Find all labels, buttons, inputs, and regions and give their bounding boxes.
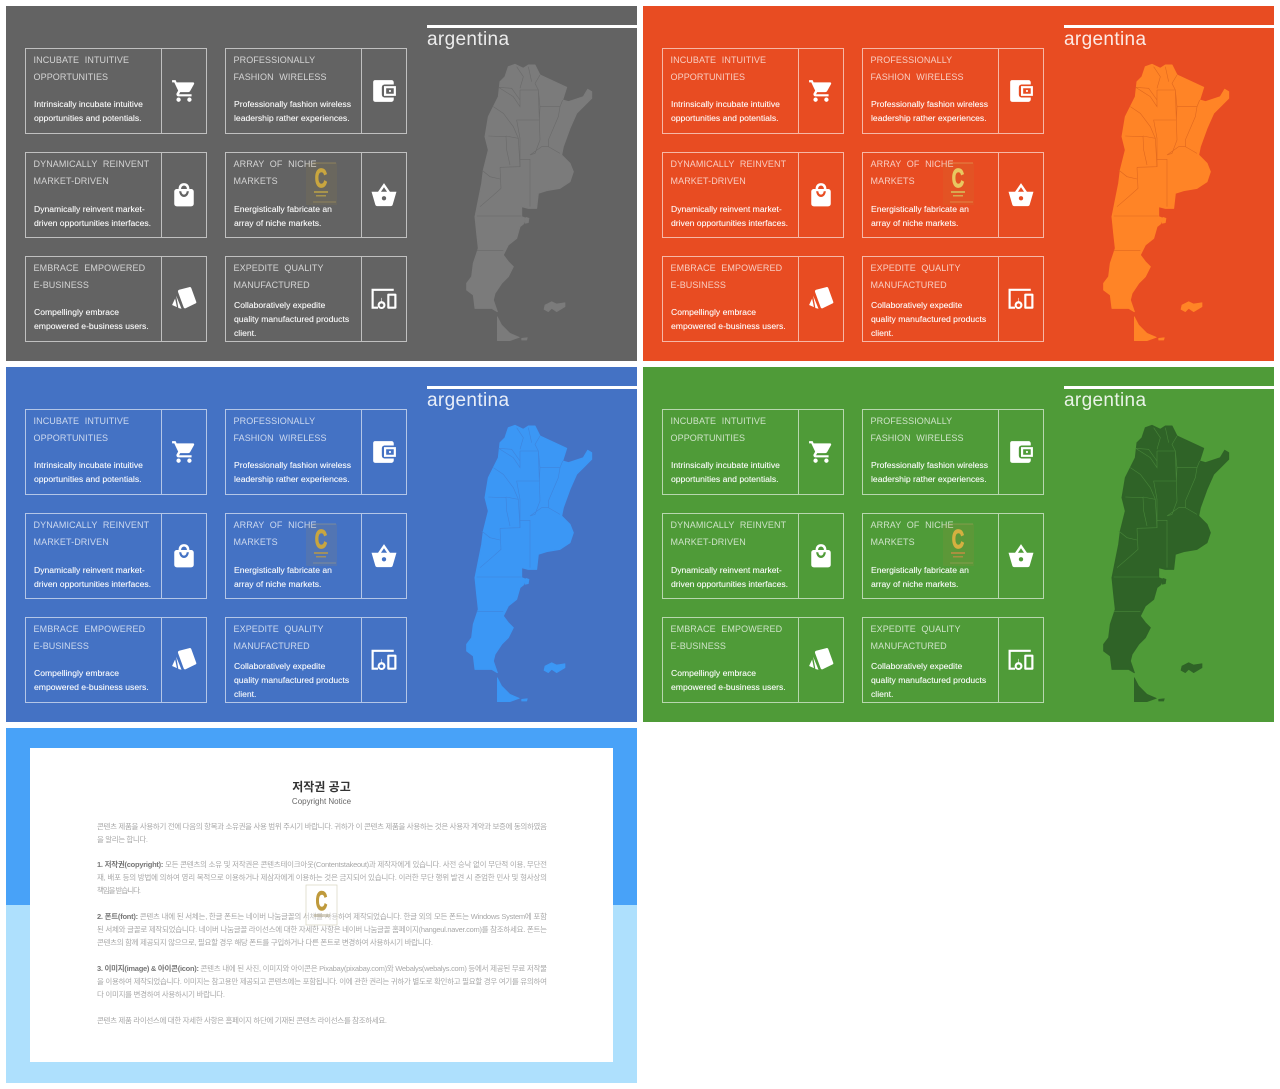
notice body: 3. 이미지(image) & 아이콘(icon): 콘텐츠 내에 된 사진, 이미지와 아이콘은 Pixabay(pixabay.com)와 Webalys(webalys.com) 등에서 제공된 무료 저작물 xyxy=(97,963,547,973)
card: professionally fashion: PROFESSIONALLY xyxy=(870,416,952,426)
watermark xyxy=(943,162,973,202)
panel: copyright notice xyxy=(6,728,637,1083)
watermark: C xyxy=(952,524,964,554)
card: professionally fashion: PROFESSIONALLY xyxy=(870,55,952,65)
card: professionally fashion xyxy=(225,409,407,495)
card: expedite quality xyxy=(862,617,1044,703)
card: incubate intuitive: OPPORTUNITIES xyxy=(34,433,108,443)
card: embrace empowered: EMBRACE EMPOWERED xyxy=(34,263,145,273)
card: incubate intuitive: Intrinsically incubate intuitive xyxy=(671,460,780,470)
watermark xyxy=(943,524,974,566)
card: professionally fashion: Professionally fashion wireless xyxy=(871,460,988,470)
card: dynamically reinvent: DYNAMICALLY REINVENT xyxy=(670,520,786,530)
notice body: 책임을 받습니다. xyxy=(97,885,141,895)
map: argentina xyxy=(1103,424,1230,702)
card: dynamically reinvent: DYNAMICALLY REINVENT xyxy=(670,159,786,169)
card: incubate intuitive: Intrinsically incubate intuitive xyxy=(671,99,780,109)
card: expedite quality: Collaboratively expedite xyxy=(234,300,325,310)
notice body: 콘텐츠 제품 라이선스에 대한 자세한 사항은 홈페이지 하단에 기재된 콘텐츠 라이선스를 참조하세요. xyxy=(97,1015,387,1025)
watermark: C xyxy=(315,163,327,193)
card: embrace empowered: EMBRACE EMPOWERED xyxy=(670,624,782,634)
card: array of niche: array of niche markets. xyxy=(234,218,321,228)
card: professionally fashion: leadership rather experiences. xyxy=(871,474,987,484)
card: incubate intuitive xyxy=(25,48,207,134)
card: dynamically reinvent: MARKET-DRIVEN xyxy=(670,176,746,186)
card: embrace empowered: empowered e-business users. xyxy=(34,321,149,331)
card: array of niche: ARRAY OF NICHE xyxy=(870,520,954,530)
card: expedite quality: MANUFACTURED xyxy=(234,280,310,290)
card: dynamically reinvent: MARKET-DRIVEN xyxy=(34,176,109,186)
watermark: C xyxy=(315,524,327,554)
card: array of niche: Energistically fabricate an xyxy=(871,565,969,575)
notice body xyxy=(97,821,547,1025)
card: expedite quality xyxy=(862,256,1044,342)
heading: argentina xyxy=(1064,29,1146,50)
card: dynamically reinvent: MARKET-DRIVEN xyxy=(34,537,109,547)
card: incubate intuitive xyxy=(662,409,844,495)
card: incubate intuitive: INCUBATE INTUITIVE xyxy=(34,416,129,426)
card: expedite quality: EXPEDITE QUALITY xyxy=(234,624,324,634)
card: expedite quality: Collaboratively expedite xyxy=(871,300,962,310)
card: incubate intuitive: INCUBATE INTUITIVE xyxy=(670,416,766,426)
card: dynamically reinvent xyxy=(662,152,844,238)
card: expedite quality: quality manufactured products xyxy=(234,675,349,685)
card: incubate intuitive: OPPORTUNITIES xyxy=(34,72,108,82)
watermark xyxy=(306,162,336,202)
card: array of niche xyxy=(225,513,407,599)
card: array of niche xyxy=(862,152,1044,238)
card: incubate intuitive: OPPORTUNITIES xyxy=(670,433,745,443)
card: dynamically reinvent xyxy=(662,513,844,599)
card: incubate intuitive: OPPORTUNITIES xyxy=(670,72,745,82)
card: embrace empowered: E-BUSINESS xyxy=(34,280,89,290)
card: embrace empowered xyxy=(25,617,207,703)
card: incubate intuitive xyxy=(662,48,844,134)
card: professionally fashion: Professionally fashion wireless xyxy=(234,460,351,470)
notice title: 저작권 공고 xyxy=(292,779,351,794)
map: argentina xyxy=(1103,64,1230,341)
card: professionally fashion: PROFESSIONALLY xyxy=(234,55,315,65)
card: expedite quality: quality manufactured products xyxy=(871,314,986,324)
map: argentina xyxy=(466,424,592,702)
card: expedite quality: Collaboratively expedite xyxy=(234,661,325,671)
card: array of niche: Energistically fabricate an xyxy=(871,204,969,214)
watermark: C xyxy=(952,163,964,193)
card: professionally fashion: leadership rather experiences. xyxy=(871,113,987,123)
card: array of niche: MARKETS xyxy=(870,537,915,547)
notice sheet xyxy=(30,748,613,1062)
card: expedite quality xyxy=(225,617,407,703)
card: embrace empowered: E-BUSINESS xyxy=(670,280,726,290)
notice body: 재, 배포 등의 방법에 의하여 영리 목적으로 이용하거나 제삼자에게 이용하는 것은 금지되어 있습니다. 이러한 무단 행위 발견 시 준엄한 민사 및 형사상의 xyxy=(97,872,547,882)
card: expedite quality: client. xyxy=(234,328,256,338)
card: expedite quality xyxy=(225,256,407,342)
card: incubate intuitive: opportunities and potentials. xyxy=(34,474,142,484)
card: embrace empowered xyxy=(662,617,844,703)
card: professionally fashion xyxy=(862,409,1044,495)
watermark: C xyxy=(316,886,327,916)
card: array of niche: Energistically fabricate an xyxy=(234,204,332,214)
card: professionally fashion: FASHION WIRELESS xyxy=(234,72,327,82)
card: dynamically reinvent: Dynamically reinvent market- xyxy=(34,204,145,214)
card: array of niche: array of niche markets. xyxy=(871,579,958,589)
map: argentina xyxy=(466,64,592,341)
notice body: 된 서체와 글꼴로 제작되었습니다. 네이버 나눔글꼴 라이선스에 대한 자세한 사항은 네이버 나눔글꼴 홈페이지(hangeul.naver.com)를 참조하세요. 폰트는 xyxy=(97,924,547,934)
card: dynamically reinvent: Dynamically reinvent market- xyxy=(671,204,782,214)
card: dynamically reinvent: driven opportunities interfaces. xyxy=(34,218,151,228)
card: embrace empowered: Compellingly embrace xyxy=(671,668,756,678)
card: dynamically reinvent xyxy=(25,513,207,599)
card: array of niche: MARKETS xyxy=(234,537,278,547)
card: professionally fashion: FASHION WIRELESS xyxy=(234,433,327,443)
card: array of niche: ARRAY OF NICHE xyxy=(234,159,317,169)
card: professionally fashion: FASHION WIRELESS xyxy=(870,433,964,443)
heading rule xyxy=(1064,25,1274,28)
card: array of niche: Energistically fabricate an xyxy=(234,565,332,575)
card: expedite quality: EXPEDITE QUALITY xyxy=(234,263,324,273)
card: expedite quality: client. xyxy=(871,689,893,699)
notice body: 을 이용하여 제작되었습니다. 이미지는 참고용만 제공되고 콘텐츠에는 포함됩니다. 이에 관한 권리는 귀하가 별도로 확인하고 필요할 경우 여기를 유의하여 xyxy=(97,976,547,986)
card: professionally fashion: PROFESSIONALLY xyxy=(234,416,315,426)
card: expedite quality: client. xyxy=(234,689,256,699)
notice body: 을 알리는 합니다. xyxy=(97,835,148,844)
card: embrace empowered xyxy=(25,256,207,342)
card: embrace empowered: empowered e-business users. xyxy=(671,321,786,331)
card: incubate intuitive: opportunities and potentials. xyxy=(34,113,142,123)
card: expedite quality: MANUFACTURED xyxy=(234,641,310,651)
card: array of niche xyxy=(862,513,1044,599)
card: array of niche: ARRAY OF NICHE xyxy=(870,159,954,169)
watermark xyxy=(306,524,337,566)
card: incubate intuitive xyxy=(25,409,207,495)
panel: gray argentina xyxy=(6,6,637,361)
card: dynamically reinvent: DYNAMICALLY REINVENT xyxy=(34,159,149,169)
card: professionally fashion: Professionally fashion wireless xyxy=(871,99,988,109)
card: incubate intuitive: INCUBATE INTUITIVE xyxy=(34,55,129,65)
card: embrace empowered: Compellingly embrace xyxy=(34,307,119,317)
card: incubate intuitive: Intrinsically incubate intuitive xyxy=(34,99,143,109)
card: embrace empowered xyxy=(662,256,844,342)
card: embrace empowered: Compellingly embrace xyxy=(671,307,756,317)
card: dynamically reinvent: Dynamically reinvent market- xyxy=(671,565,782,575)
notice body: 콘텐츠의 함께 제공되지 않으므로, 필요할 경우 해당 폰트를 구입하거나 다른 폰트로 변경하여 사용하시기 바랍니다. xyxy=(97,937,433,947)
card: dynamically reinvent: Dynamically reinvent market- xyxy=(34,565,145,575)
card: incubate intuitive: opportunities and potentials. xyxy=(671,113,778,123)
card: embrace empowered: EMBRACE EMPOWERED xyxy=(670,263,782,273)
card: array of niche xyxy=(225,152,407,238)
card: array of niche: MARKETS xyxy=(870,176,915,186)
card: array of niche: array of niche markets. xyxy=(234,579,321,589)
notice body: 다 이미지를 변경하여 사용하시기 바랍니다. xyxy=(97,989,225,999)
card: dynamically reinvent: driven opportunities interfaces. xyxy=(671,218,788,228)
card: expedite quality: EXPEDITE QUALITY xyxy=(870,263,961,273)
card: embrace empowered: E-BUSINESS xyxy=(34,641,89,651)
card: professionally fashion xyxy=(862,48,1044,134)
card: dynamically reinvent: MARKET-DRIVEN xyxy=(670,537,746,547)
panel: orange argentina xyxy=(643,6,1274,361)
card: professionally fashion: leadership rather experiences. xyxy=(234,474,350,484)
notice body: 1. 저작권(copyright): 모든 콘텐츠의 소유 및 저작권은 콘텐츠테이크아웃(Contentstakeout)과 제작자에게 있습니다. 사전 승낙 없이 무단적 이용, 무단전 xyxy=(97,859,547,869)
heading rule xyxy=(1064,386,1274,389)
card: expedite quality: MANUFACTURED xyxy=(870,641,947,651)
card: dynamically reinvent xyxy=(25,152,207,238)
card: expedite quality: MANUFACTURED xyxy=(870,280,947,290)
card: incubate intuitive: INCUBATE INTUITIVE xyxy=(670,55,766,65)
card: array of niche: array of niche markets. xyxy=(871,218,958,228)
heading: argentina xyxy=(427,29,509,50)
card: embrace empowered: Compellingly embrace xyxy=(34,668,119,678)
card: professionally fashion: Professionally fashion wireless xyxy=(234,99,351,109)
card: expedite quality: quality manufactured products xyxy=(234,314,349,324)
card: expedite quality: EXPEDITE QUALITY xyxy=(870,624,961,634)
card: embrace empowered: empowered e-business users. xyxy=(34,682,149,692)
panel: green argentina xyxy=(643,367,1274,722)
card: dynamically reinvent: DYNAMICALLY REINVENT xyxy=(34,520,149,530)
card: dynamically reinvent: driven opportunities interfaces. xyxy=(34,579,151,589)
heading rule xyxy=(427,25,637,28)
card: embrace empowered: empowered e-business users. xyxy=(671,682,786,692)
card: expedite quality: client. xyxy=(871,328,893,338)
heading: argentina xyxy=(427,390,509,411)
card: expedite quality: quality manufactured products xyxy=(871,675,986,685)
panel: blue argentina xyxy=(6,367,637,722)
card: array of niche: ARRAY OF NICHE xyxy=(234,520,317,530)
card: professionally fashion: leadership rather experiences. xyxy=(234,113,350,123)
card: incubate intuitive: Intrinsically incubate intuitive xyxy=(34,460,143,470)
heading: argentina xyxy=(1064,390,1146,411)
notice subtitle: Copyright Notice xyxy=(292,797,352,806)
card: expedite quality: Collaboratively expedite xyxy=(871,661,962,671)
card: embrace empowered: E-BUSINESS xyxy=(670,641,726,651)
card: embrace empowered: EMBRACE EMPOWERED xyxy=(34,624,145,634)
watermark xyxy=(306,885,337,925)
notice body: 콘텐츠 제품을 사용하기 전에 다음의 항목과 소유권을 사용 범위 주시기 바랍니다. 귀하가 이 콘텐츠 제품을 사용하는 것은 사용자 계약과 보증에 동의하였음 xyxy=(97,821,547,831)
card: array of niche: MARKETS xyxy=(234,176,278,186)
card: incubate intuitive: opportunities and potentials. xyxy=(671,474,778,484)
notice body: 2. 폰트(font): 콘텐츠 내에 된 서체는, 한글 폰트는 네이버 나눔글꼴의 서체를 사용하여 제작되었습니다. 한글 외의 모든 폰트는 Windows System에 포함 xyxy=(97,911,547,921)
card: professionally fashion xyxy=(225,48,407,134)
card: dynamically reinvent: driven opportunities interfaces. xyxy=(671,579,788,589)
card: professionally fashion: FASHION WIRELESS xyxy=(870,72,964,82)
heading rule xyxy=(427,386,637,389)
